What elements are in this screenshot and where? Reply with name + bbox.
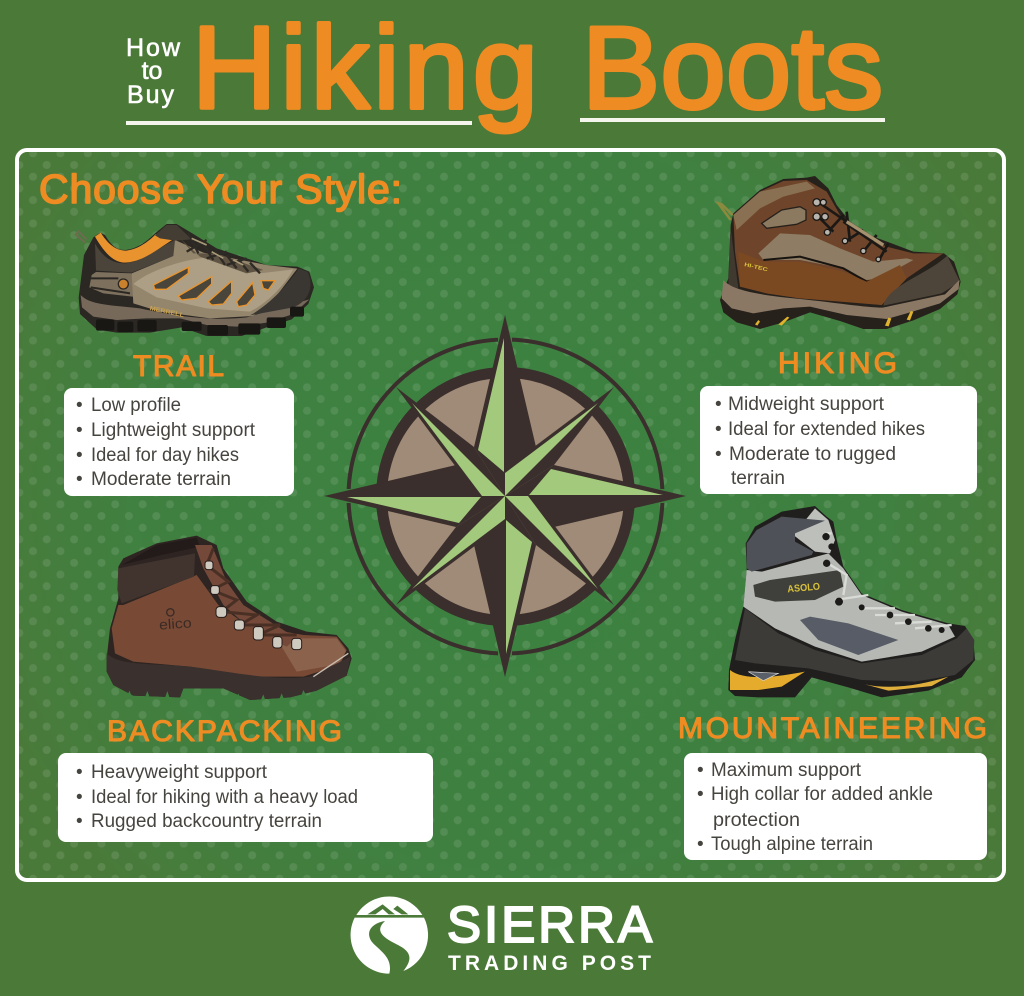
text box: hiking: • <box>715 419 722 440</box>
card: trail <box>64 350 294 496</box>
text box: mountaineering: Tough alpine terrain <box>711 834 873 855</box>
title: boots: Boots <box>582 2 883 133</box>
title: how to buy: How <box>126 34 181 62</box>
boot: backpacking <box>107 536 352 700</box>
boot: trail: MERRELL <box>149 305 185 319</box>
boot: hiking <box>718 176 961 329</box>
title: how to buy: to <box>142 57 162 85</box>
boot: mountaineering <box>728 506 975 697</box>
card: mountaineering <box>678 712 987 860</box>
text box: mountaineering <box>684 753 987 860</box>
boot: trail <box>76 224 314 336</box>
text box: trail: Moderate terrain <box>91 469 231 490</box>
text box: hiking: Moderate to rugged <box>729 444 896 465</box>
text box: hiking: Midweight support <box>728 394 885 415</box>
logo text: trading post: TRADING POST <box>448 952 651 975</box>
text box: backpacking: Ideal for hiking with a heavy load <box>91 787 358 808</box>
heading: hiking: HIKING <box>778 347 897 380</box>
boot: hiking: HI-TEC <box>744 262 768 273</box>
text box: hiking: terrain <box>731 468 785 489</box>
text box: trail: • <box>76 395 83 416</box>
text box: mountaineering: • <box>697 834 704 855</box>
title: hiking: Hiking <box>192 2 538 133</box>
text box: trail: Low profile <box>91 395 181 416</box>
text box: hiking <box>700 386 977 494</box>
icon: compass rose <box>324 315 686 677</box>
icon: mountain and river <box>351 896 428 974</box>
text box: mountaineering: • <box>697 784 704 805</box>
text box: trail: • <box>76 445 83 466</box>
heading: choose your style: Choose Your Style: <box>39 166 402 212</box>
text box: mountaineering: • <box>697 760 704 781</box>
logo: sierra trading post <box>351 896 652 975</box>
card: hiking <box>700 347 977 494</box>
title <box>126 2 885 133</box>
text box: trail: Lightweight support <box>91 420 256 441</box>
text box: trail: Ideal for day hikes <box>91 445 239 466</box>
title: how to buy <box>126 34 181 109</box>
text box: hiking: • <box>715 394 722 415</box>
boot: mountaineering: ASOLO <box>787 581 821 595</box>
text box: hiking: • <box>715 444 722 465</box>
text box: trail: • <box>76 469 83 490</box>
heading: trail: TRAIL <box>133 350 224 383</box>
text box: hiking: Ideal for extended hikes <box>728 419 925 440</box>
boot: backpacking: elico <box>158 614 192 633</box>
text box: backpacking: Heavyweight support <box>91 762 268 783</box>
title underlines <box>126 118 885 125</box>
text box: mountaineering: High collar for added ankle <box>711 784 933 805</box>
title: how to buy: Buy <box>127 81 174 109</box>
text box: backpacking: • <box>76 811 83 832</box>
text box: backpacking <box>58 753 433 842</box>
text box: trail <box>64 388 294 496</box>
text box: backpacking: • <box>76 762 83 783</box>
logo text: sierra: SIERRA <box>447 896 652 953</box>
panel: choose your style <box>17 150 1004 880</box>
text box: backpacking: • <box>76 787 83 808</box>
text box: trail: • <box>76 420 83 441</box>
text box: mountaineering: protection <box>713 810 800 831</box>
heading: backpacking: BACKPACKING <box>107 715 342 748</box>
heading: mountaineering: MOUNTAINEERING <box>678 712 987 745</box>
text box: mountaineering: Maximum support <box>711 760 862 781</box>
card: backpacking <box>58 715 433 842</box>
text box: backpacking: Rugged backcountry terrain <box>91 811 322 832</box>
